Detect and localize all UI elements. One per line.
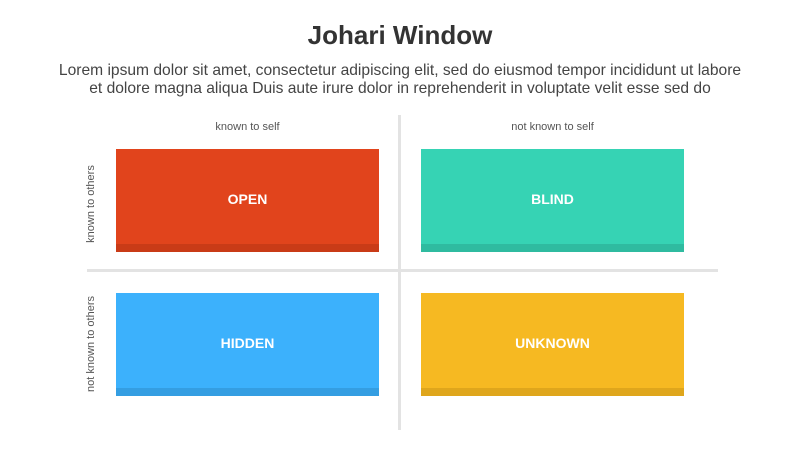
label: not known to others: not known to others xyxy=(85,296,97,392)
panel: blind xyxy=(421,149,684,252)
panel: blind: BLIND xyxy=(531,190,574,206)
subtitle text xyxy=(59,62,741,97)
panel: hidden: HIDDEN xyxy=(221,334,274,350)
subtitle text: et dolore magna aliqua Duis aute irure dolor in reprehenderit in voluptate velit esse sed do xyxy=(89,80,711,97)
label: known to self: known to self xyxy=(215,121,280,133)
panel: open: OPEN xyxy=(228,190,267,206)
subtitle text: Lorem ipsum dolor sit amet, consectetur adipiscing elit, sed do eiusmod tempor incididunt ut labore xyxy=(59,62,741,79)
panel: unknown xyxy=(421,293,684,396)
panel: open xyxy=(116,149,379,252)
title: Johari Window xyxy=(308,20,492,50)
label: not known to self: not known to self xyxy=(511,121,594,133)
panel: hidden xyxy=(116,293,379,396)
label: known to others: known to others xyxy=(85,165,97,243)
panel: unknown: UNKNOWN xyxy=(515,334,590,350)
